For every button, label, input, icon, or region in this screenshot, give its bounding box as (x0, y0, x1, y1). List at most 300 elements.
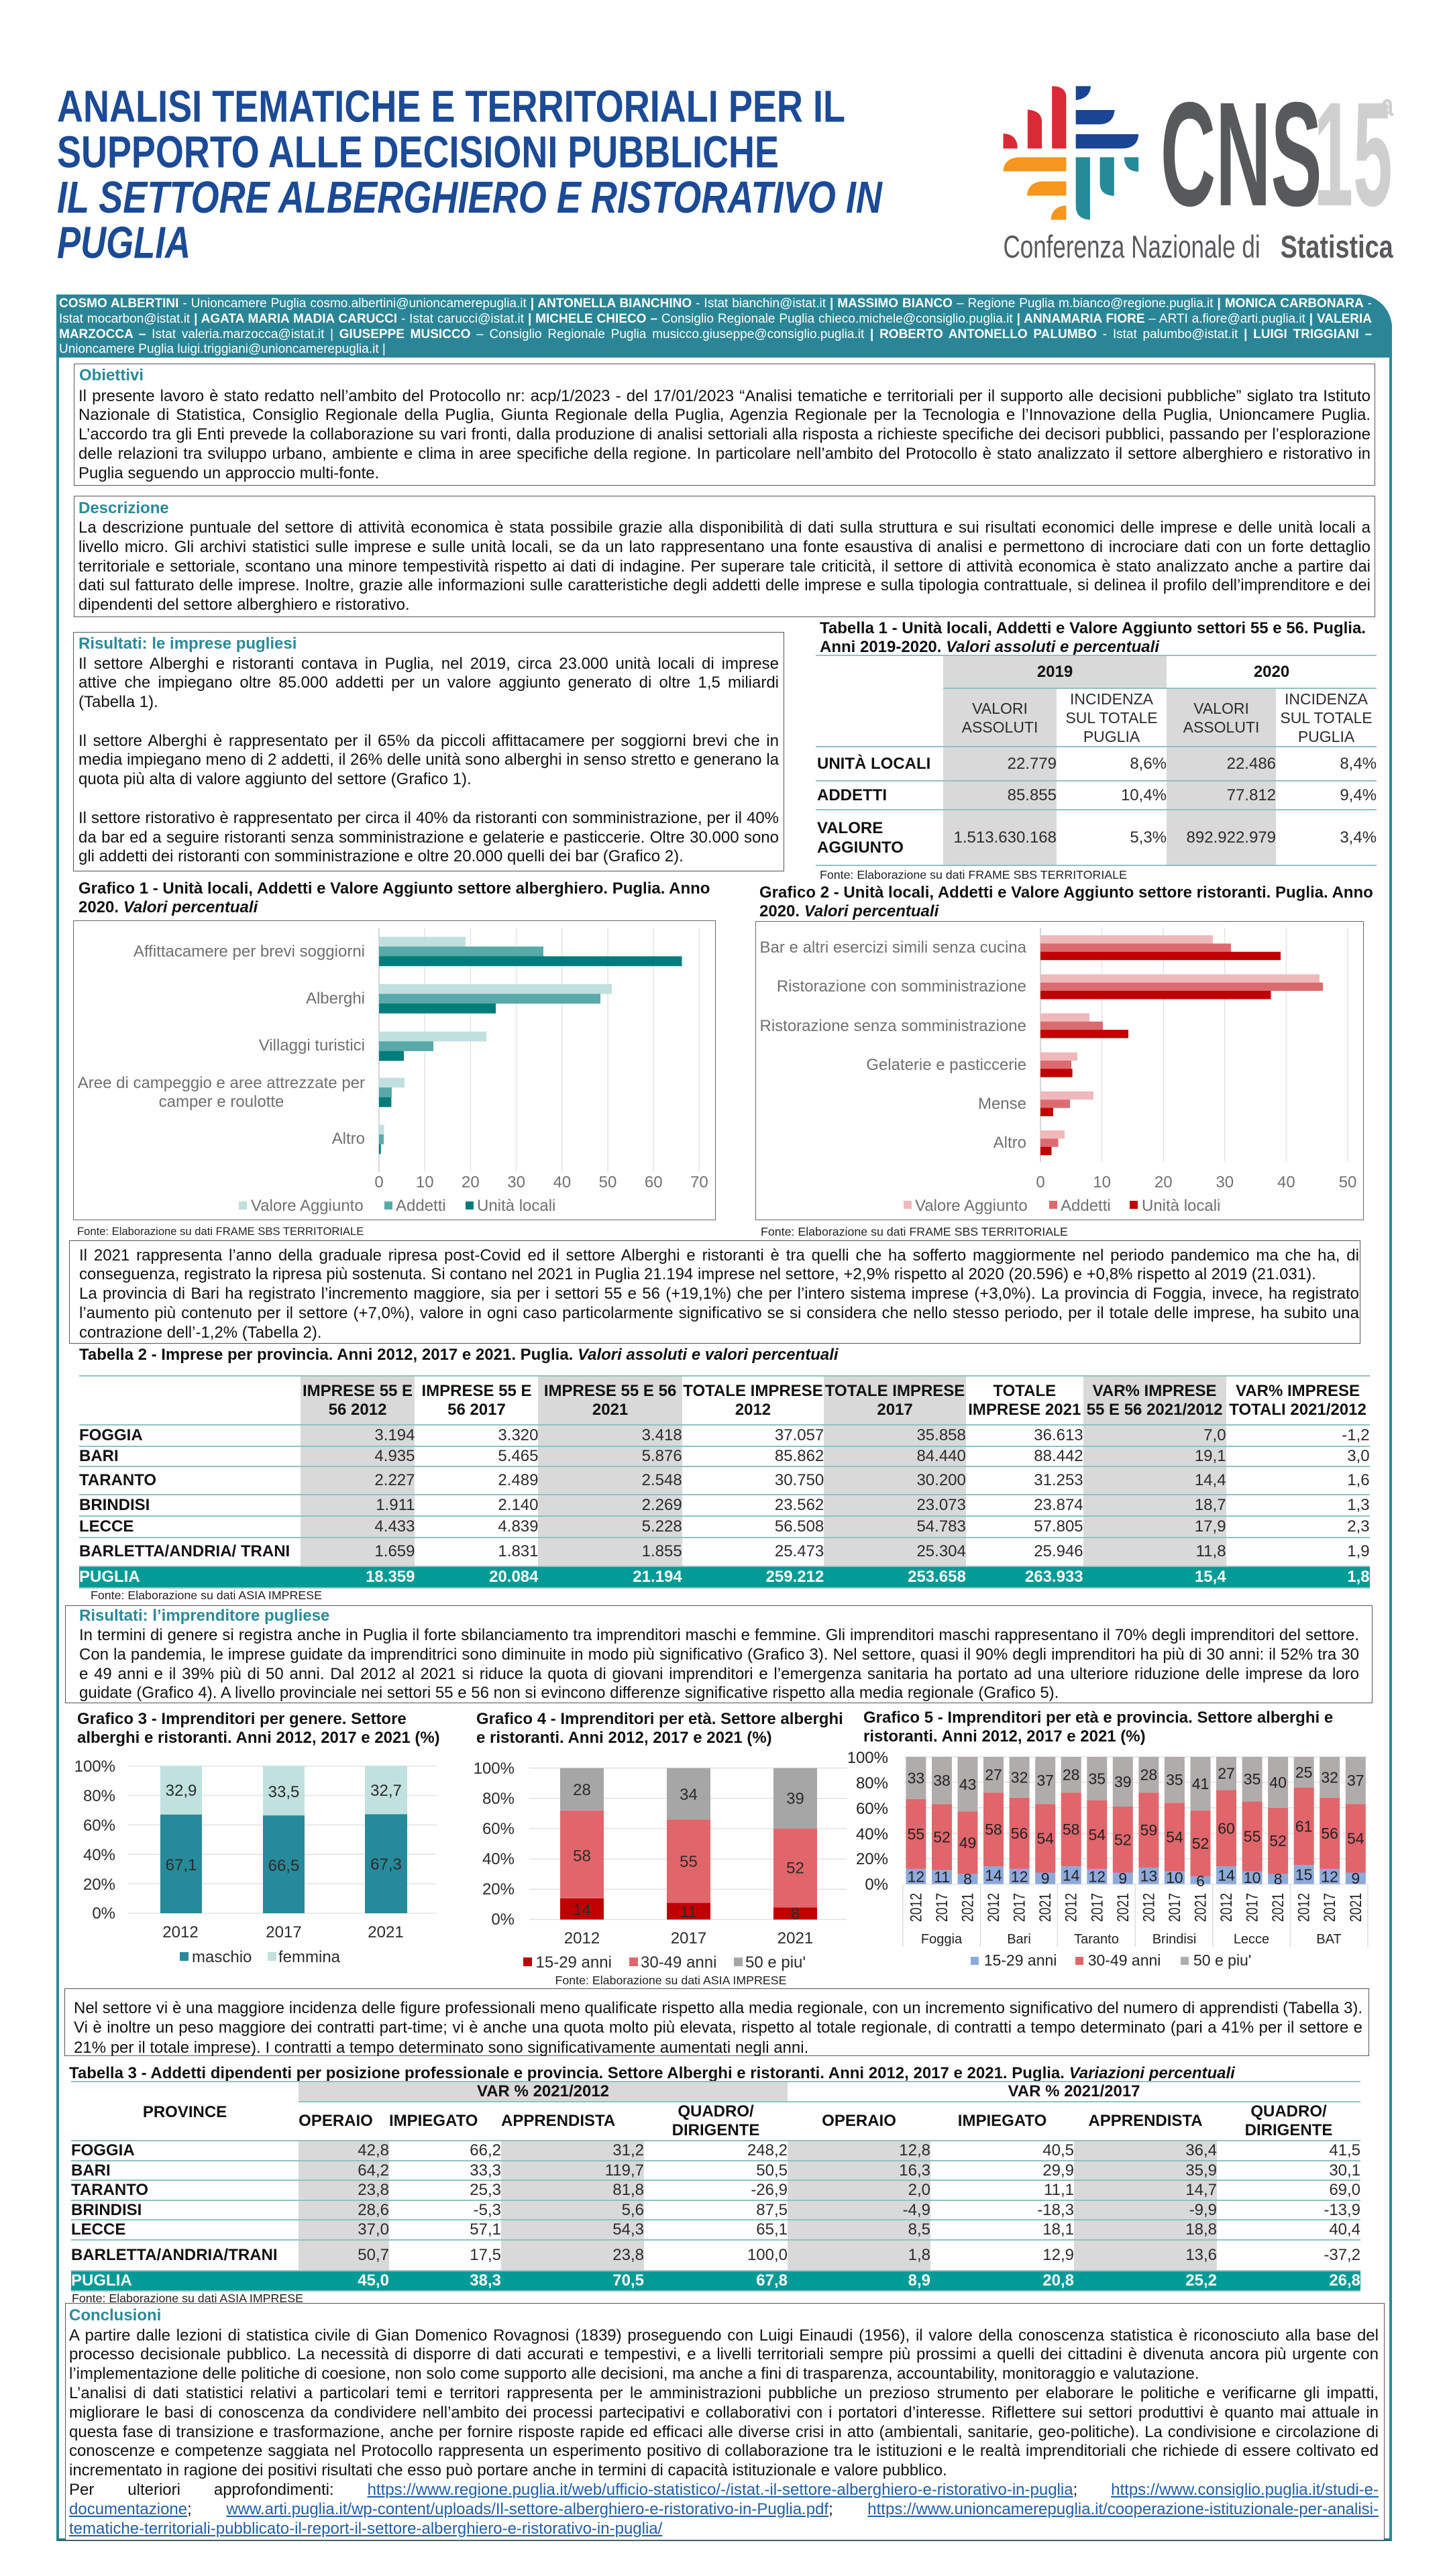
bars: Taranto: 52 (1114, 1831, 1132, 1848)
text block: Obiettivi: delle relazioni tra sviluppo urbano, ambiente e clima in aree specifiche della regione. In particolare nell’ambito del Protocollo è stato analizzato il settore alberghiero e ristorativo in (78, 445, 1371, 463)
bar: 2017 (667, 1768, 710, 1947)
table: Tabella 3: 67,8 (756, 2271, 788, 2290)
text block: figure professionali: 21% per il totale imprese). I contratti a tempo determinato sono significativamente aumentati negli anni. (74, 2038, 808, 2057)
table: Tabella 1: SUL TOTALE (1065, 708, 1158, 726)
bar: 2012: 14 (573, 1901, 591, 1919)
text block: Conclusioni: L’analisi di dati statistici relativi a particolari temi e territori rappresenta per le amministrazioni pubbliche un prezioso strumento per elaborare le politiche e verificarne gli impatti, (69, 2384, 1379, 2402)
bars: BAT: 2012 (1295, 1893, 1313, 1922)
heading: Grafico 1: Grafico 1 - Unità locali, Addetti e Valore Aggiunto settore alberghiero. Puglia. Anno (78, 879, 710, 898)
bars: BAT: 54 (1347, 1829, 1364, 1847)
text block: Conclusioni: A partire dalle lezioni di statistica civile di Gian Domenico Rovagnosi (1839) proseguendo con Luigi Einaudi (1956), il valore della conoscenza statistica è riconosciuto alla base del (69, 2326, 1379, 2345)
bars: Foggia: 12 (908, 1868, 924, 1885)
table: Tabella 1: 10,4% (1121, 786, 1167, 804)
table: Tabella 1: ASSOLUTI (962, 718, 1038, 735)
table: Tabella 3: IMPIEGATO (389, 2112, 478, 2130)
table: Tabella 2: TOTALE IMPRESE (825, 1382, 965, 1399)
stacked bar chart: Grafico 5 (849, 1749, 1368, 1969)
table: Tabella 3: APPRENDISTA (501, 2112, 615, 2130)
y axis labels: 60% (83, 1817, 115, 1835)
bar: 2021 (365, 1766, 407, 1941)
table: Tabella 2: 56 2017 (447, 1401, 506, 1418)
bar: 2012 (160, 1766, 202, 1941)
table: Tabella 2: 5.465 (498, 1447, 538, 1465)
table: Tabella 2: 57.805 (1034, 1517, 1083, 1536)
table: Tabella 2: FOGGIA (79, 1426, 143, 1444)
y axis labels: 0% (92, 1904, 115, 1923)
axis labels: 70 (690, 1173, 708, 1191)
table: Tabella 3: 100,0 (747, 2246, 788, 2264)
text block: Descrizione: livello micro. Gli archivi statistici sulle imprese e sulle unità locali, se da un lato rappresentano una fonte esaustiva di analisi e permettono di incrociare dati con un forte dettaglio (78, 538, 1371, 556)
y axis labels (474, 1760, 515, 1929)
table: Tabella 3: 69,0 (1329, 2181, 1360, 2199)
heading: Tabella 3: Tabella 3 - Addetti dipendenti per posizione professionale e provincia. Settore Alberghi e ristoranti. Anni 2012, 2017 e 2021. Puglia. Variazioni percentuali (69, 2064, 1235, 2082)
panel: authors band: COSMO ALBERTINI - Unioncamere Puglia cosmo.albertini@unioncamerepuglia.it | ANTONELLA BIANCHINO - Istat bianchin@istat.it | MASSIMO BIANCO – Regione Puglia m.bianco@regione.puglia.it | MONICA CARBONARA - (59, 297, 1372, 311)
bar: 2012: 67,1 (166, 1856, 197, 1874)
bars: Ristorazione con somministrazione: Ristorazione con somministrazione (777, 977, 1026, 996)
table: Tabella 2: 15,4 (1195, 1568, 1226, 1586)
bars: Brindisi: Brindisi (1152, 1932, 1196, 1947)
table: Tabella 2: 54.783 (916, 1517, 966, 1536)
bars: Foggia: 55 (908, 1825, 924, 1843)
table: Tabella 1: ADDETTI (817, 786, 887, 804)
bars: BAT: 32 (1321, 1768, 1338, 1786)
heading: Descrizione: Descrizione (78, 499, 169, 517)
bars: BAT: 2021 (1346, 1893, 1364, 1922)
panel: Descrizione (74, 496, 1375, 617)
text block: imprenditore (79, 1626, 1359, 1702)
bars: Brindisi: 59 (1140, 1821, 1157, 1839)
heading: Grafico 3 (77, 1710, 440, 1747)
table: Tabella 1: PUGLIA (1083, 727, 1140, 745)
bars: Bari: Bari (1007, 1932, 1031, 1947)
table: Tabella 2: 7,0 (1203, 1426, 1226, 1444)
heading: Grafico 1 (78, 879, 710, 916)
bars: BAT: 61 (1295, 1817, 1312, 1835)
title (57, 81, 883, 268)
bars: Lecce: 2012 (1217, 1893, 1235, 1922)
text block: ripresa 2021: conseguenza, registrato la ripresa più sostenuta. Si contano nel 2021 in Puglia 21.194 imprese nel settore, +2,9% rispetto al 2020 (20.596) e +0,8% rispetto al 2019 (21.031). (79, 1265, 1316, 1283)
bars: Bari: 2021 (1036, 1893, 1055, 1922)
table: Tabella 3: OPERAIO (822, 2112, 896, 2130)
axis labels: 40 (553, 1173, 571, 1191)
bars: Lecce: 27 (1218, 1765, 1235, 1782)
table: Tabella 2: 1,9 (1347, 1542, 1370, 1560)
table: Tabella 2: 2021 (592, 1401, 628, 1418)
panel: Obiettivi (74, 364, 1375, 486)
axis labels: 30 (1216, 1173, 1234, 1191)
table: Tabella 2: 1,8 (1347, 1568, 1370, 1586)
table: Tabella 3: FOGGIA (71, 2141, 135, 2159)
table: Tabella 1: 1.513.630.168 (954, 828, 1057, 847)
table: Tabella 3: -13,9 (1324, 2200, 1360, 2219)
table: Tabella 3: 25,2 (1185, 2271, 1217, 2290)
table: Tabella 2: 23.562 (775, 1496, 824, 1514)
table: Tabella 2: BARLETTA/ANDRIA/ TRANI (79, 1542, 290, 1560)
bars: Lecce: 55 (1244, 1827, 1260, 1845)
bars: Foggia (906, 1757, 978, 1947)
table: Tabella 2: TOTALE IMPRESE (683, 1382, 823, 1399)
source: Tabella 3: Fonte: Elaborazione su dati ASIA IMPRESE (72, 2292, 303, 2305)
table: Tabella 2: 1,6 (1347, 1471, 1370, 1489)
y axis labels: 80% (856, 1774, 888, 1792)
logo: CNS 15a Conferenza Nazionale di Statistica: CNS (1161, 72, 1322, 237)
table: Tabella 1: 8,4% (1340, 754, 1377, 773)
bar: 2017: 34 (680, 1786, 698, 1804)
table: Tabella 2: 1.911 (376, 1496, 415, 1514)
text block: Risultati imprese: attive che impiegano oltre 85.000 addetti per un valore aggiunto generato di oltre 1,5 miliardi (78, 674, 779, 692)
bars: BAT: 15 (1295, 1866, 1312, 1883)
text block: Obiettivi: L’accordo tra gli Enti prevede la collaborazione su vari fronti, dalla produzione di analisi settoriali alla risposta a richieste specifiche dei decisori pubblici, passando per l’esplorazione (78, 425, 1371, 443)
table: Tabella 3: 50,5 (756, 2161, 788, 2179)
axis labels: 20 (462, 1173, 480, 1191)
table: Tabella 3: 5,6 (622, 2200, 644, 2219)
table: Tabella 2: 2,3 (1347, 1517, 1370, 1536)
y axis labels: 60% (856, 1800, 888, 1818)
table: Tabella 3: PUGLIA (71, 2271, 132, 2290)
text block: Risultati imprese (78, 655, 779, 865)
table: Tabella 3: 66,2 (470, 2141, 501, 2159)
table: Tabella 2: 30.200 (916, 1471, 966, 1489)
bars: Bari: 32 (1011, 1768, 1028, 1786)
table: Tabella 2: 18.359 (366, 1568, 415, 1586)
bar: 2012: 32,9 (166, 1782, 197, 1800)
table: Tabella 3: 18,8 (1185, 2220, 1217, 2239)
table: Tabella 2: 37.057 (775, 1426, 824, 1444)
heading: Grafico 5: ristoranti. Anni 2012, 2017 e 2021 (%) (863, 1727, 1146, 1746)
table: Tabella 3: 45,0 (358, 2271, 389, 2290)
axis labels: 40 (1277, 1173, 1295, 1191)
table: Tabella 3: 16,3 (899, 2161, 930, 2179)
bars: Bari: 12 (1011, 1868, 1028, 1885)
bars: BAT: 9 (1351, 1870, 1360, 1887)
table: Tabella 2: 23.874 (1034, 1496, 1083, 1514)
table: Tabella 3: 25,3 (470, 2181, 501, 2199)
table: Tabella 3: 12,9 (1042, 2246, 1074, 2264)
table: Tabella 2: 2.140 (498, 1496, 538, 1514)
legend (180, 1948, 341, 1966)
table: Tabella 2: BARI (79, 1447, 119, 1465)
panel: Risultati imprenditore pugliese (65, 1605, 1373, 1703)
table: Tabella 1: 2020 (1254, 663, 1289, 680)
table: Tabella 2: TARANTO (79, 1471, 156, 1489)
table: Tabella 3: BARI (71, 2161, 111, 2179)
table: Tabella 2: IMPRESE 55 E (421, 1382, 532, 1399)
axis labels: 20 (1155, 1173, 1173, 1191)
bars: BAT: 25 (1295, 1764, 1312, 1781)
table: Tabella 2: 56.508 (775, 1517, 824, 1536)
bars: Ristorazione senza somministrazione (759, 1013, 1128, 1038)
table: Tabella 2: 31.253 (1034, 1471, 1083, 1489)
y axis labels: 40% (482, 1850, 515, 1868)
bar: 2017 (263, 1766, 305, 1941)
text block: imprenditore: guidate (Grafico 4). A livello provinciale nei settori 55 e 56 non si evincono differenze significative rispetto alla media regionale (Grafico 5). (79, 1684, 1059, 1702)
table: Tabella 2: 1.831 (498, 1542, 538, 1560)
legend: Unità locali (477, 1197, 555, 1215)
text block: Risultati imprese: Il settore Alberghi e ristoranti contava in Puglia, nel 2019, circa 23.000 unità locali di imprese (78, 655, 779, 672)
bars: Taranto: 2012 (1062, 1893, 1080, 1922)
table: Tabella 3 (71, 2081, 1360, 2292)
bar: 2021: 39 (786, 1790, 804, 1808)
heading: Tabella 1: Tabella 1 - Unità locali, Addetti e Valore Aggiunto settori 55 e 56. Puglia. (820, 619, 1366, 637)
bars: Villaggi turistici (259, 1032, 486, 1061)
bars: Affittacamere (133, 936, 682, 966)
table: Tabella 3: 64,2 (358, 2161, 389, 2179)
bars: Lecce: 14 (1218, 1866, 1235, 1884)
legend: 50 e piu' (745, 1953, 806, 1972)
bars: Aree di campeggio (78, 1074, 405, 1111)
bars: Foggia: 38 (933, 1772, 951, 1789)
bars: Brindisi: 54 (1166, 1829, 1183, 1846)
table: Tabella 1: 892.922.979 (1187, 828, 1276, 847)
text block: Conclusioni: questa fase di transizione e trasformazione, anche per fornire risposte rapide ed efficaci alle diverse crisi in atto (ambientali, sanitarie, geo-politiche). La condivisione e circolazione di (69, 2423, 1379, 2441)
bars: Taranto: 9 (1118, 1870, 1127, 1887)
text block: Descrizione (78, 519, 1371, 614)
bars: Foggia: 49 (959, 1834, 976, 1851)
text block: Descrizione: La descrizione puntuale del settore di attività economica è stata possibile grazie alla disponibilità di dati sulla struttura e sui risultati economici delle imprese e delle unità locali a (78, 519, 1371, 537)
bars: Lecce: 8 (1274, 1870, 1282, 1888)
source: Grafici 3-5: Fonte: Elaborazione su dati ASIA IMPRESE (555, 1974, 787, 1987)
bars: Brindisi: 10 (1166, 1869, 1183, 1886)
text block: ripresa 2021: contrazione dell’-1,2% (Tabella 2). (79, 1324, 322, 1342)
legend: Unità locali (1142, 1197, 1220, 1215)
title: PUGLIA (57, 217, 191, 268)
bar chart: Grafico 1 (73, 920, 716, 1220)
bar: 2021: 52 (786, 1860, 804, 1877)
source: Tabella 2: Fonte: Elaborazione su dati ASIA IMPRESE (91, 1589, 322, 1602)
table: Tabella 1: SUL TOTALE (1280, 708, 1373, 726)
bars: Bari: 54 (1036, 1829, 1054, 1847)
bars: Brindisi: 2021 (1191, 1893, 1210, 1922)
bars: Taranto: 54 (1089, 1826, 1106, 1843)
legend: 50 e piu' (1193, 1951, 1251, 1969)
text block: ripresa 2021: La provincia di Bari ha registrato l’incremento maggiore, sia per i settori 55 e 56 (+19,1%) che per l’intero sistema imprese (+3,0%). La provincia di Foggia, invece, ha registrato (79, 1285, 1359, 1303)
table: Tabella 2: PUGLIA (79, 1568, 140, 1586)
table: Tabella 3: 36,4 (1185, 2141, 1217, 2159)
legend (971, 1951, 1251, 1969)
bars: Foggia: 33 (908, 1769, 924, 1786)
bars: Bari: 2017 (1010, 1893, 1028, 1922)
y axis labels: 0% (491, 1911, 515, 1929)
table: Tabella 2: IMPRESE 55 E 56 (544, 1382, 676, 1399)
stacked bar chart: Grafico 3 (74, 1758, 437, 1966)
table: Tabella 3: 119,7 (605, 2161, 644, 2179)
table: Tabella 2: 19,1 (1195, 1447, 1226, 1465)
panel: Conclusioni (65, 2303, 1385, 2540)
heading: Grafico 2 (759, 883, 1373, 920)
y axis labels: 80% (83, 1787, 115, 1805)
text block: figure professionali (74, 1999, 1362, 2057)
table: Tabella 2: 263.933 (1025, 1568, 1083, 1586)
axis labels: 10 (1093, 1173, 1111, 1191)
heading: Tabella 2: Tabella 2 - Imprese per provincia. Anni 2012, 2017 e 2021. Puglia. Valori assoluti e valori percentuali (79, 1346, 839, 1364)
table: Tabella 2: 85.862 (775, 1447, 824, 1465)
table: Tabella 2: 36.613 (1034, 1426, 1083, 1444)
heading: Tabella 1: Anni 2019-2020. Valori assoluti e percentuali (820, 637, 1159, 656)
table: Tabella 2: 2012 (735, 1401, 771, 1418)
legend (523, 1953, 806, 1972)
bars: BAT: 2017 (1320, 1893, 1339, 1922)
bar: 2021 (773, 1768, 817, 1947)
text block: figure professionali: Nel settore vi è una maggiore incidenza delle figure professionali meno qualificate rispetto alla media regionale, con un incremento significativo del numero di apprendisti (Tabella 3). (74, 1999, 1362, 2017)
stacked bar chart: Grafico 4 (474, 1760, 847, 1987)
table: Tabella 3: DIRIGENTE (672, 2121, 759, 2139)
bars: Ristorazione con somministrazione (777, 974, 1323, 999)
table: Tabella 3: -9,9 (1189, 2200, 1217, 2219)
text block: Descrizione: territoriale e settoriale, scontano una minore tempestività rispetto ai dati di indagine. Per superare tale criticità, il settore di attività economica è stato analizzato anche a partire dai (78, 557, 1371, 576)
table: Tabella 2: 2.227 (374, 1471, 415, 1489)
table: Tabella 3: 30,1 (1329, 2161, 1360, 2179)
y axis labels: 40% (83, 1846, 115, 1864)
bar: 2017: 66,5 (268, 1857, 299, 1875)
table: Tabella 2: -1,2 (1342, 1426, 1370, 1444)
table: Tabella 2: 14,4 (1195, 1471, 1226, 1489)
table: Tabella 2: 35.858 (916, 1426, 966, 1444)
text block: Obiettivi: Il presente lavoro è stato redatto nell’ambito del Protocollo nr: acp/1/2023 - del 17/01/2023 “Analisi tematiche e territoriali per il supporto alle decisioni pubbliche” siglato tra Istituto (78, 386, 1371, 405)
panel: Risultati le imprese pugliesi (73, 632, 784, 871)
legend (904, 1197, 1220, 1215)
bars: BAT: 37 (1347, 1772, 1364, 1789)
table: Tabella 1: VALORI (1193, 699, 1249, 716)
table: Tabella 2: 2.489 (498, 1471, 538, 1489)
table: Tabella 3: QUADRO/ (678, 2102, 754, 2121)
table: Tabella 2: 3.194 (374, 1426, 415, 1444)
heading: Grafico 4: e ristoranti. Anni 2012, 2017 e 2021 (%) (476, 1729, 772, 1747)
table: Tabella 3: 2,0 (908, 2181, 930, 2199)
bars: Altro (332, 1125, 384, 1154)
bars: Bari: 2012 (984, 1893, 1002, 1922)
legend: 15-29 anni (984, 1951, 1057, 1969)
table: Tabella 2: 11,8 (1196, 1542, 1226, 1560)
table: Tabella 2 (79, 1375, 1370, 1589)
text block: Obiettivi: Nazionale di Statistica, Consiglio Regionale della Puglia, Giunta Regionale della Puglia, Agenzia Regionale per la Tecnologia e l’Innovazione della Puglia, Unioncamere Puglia. (78, 406, 1371, 424)
bars: Bari: 37 (1036, 1772, 1054, 1789)
bars: Mense (978, 1091, 1093, 1116)
table: Tabella 3: -26,9 (751, 2181, 788, 2199)
table: Tabella 2: 25.304 (916, 1542, 966, 1560)
heading: Grafico 1: 2020. Valori percentuali (78, 898, 258, 916)
table: Tabella 3: PROVINCE (143, 2103, 227, 2121)
bars: Taranto: 12 (1089, 1868, 1106, 1885)
bars: Foggia: 2017 (932, 1893, 951, 1922)
table: Tabella 1: 22.779 (1008, 754, 1057, 773)
source: Grafico 2: Fonte: Elaborazione su dati FRAME SBS TERRITORIALE (761, 1225, 1068, 1238)
table: Tabella 2: 25.473 (775, 1542, 824, 1560)
table: Tabella 2: 3,0 (1347, 1447, 1370, 1465)
table: Tabella 2: 2017 (877, 1401, 913, 1418)
text block: Obiettivi (78, 386, 1371, 482)
bar: 2017: 33,5 (268, 1783, 299, 1801)
text block: imprenditore: In termini di genere si registra anche in Puglia il forte sbilanciamento tra imprenditori maschi e femmine. Gli imprenditori maschi rappresentano il 70% degli imprenditori del settore. (79, 1626, 1359, 1644)
y axis labels (74, 1758, 115, 1923)
bars: Lecce: 40 (1269, 1774, 1287, 1791)
text block: Risultati imprese: da bar ed a seguire ristoranti senza somministrazione e gelaterie e pasticcerie. Oltre 30.000 sono (78, 828, 779, 847)
table: Tabella 3: OPERAIO (299, 2112, 373, 2130)
text block: ripresa 2021 (79, 1246, 1359, 1342)
text block: Risultati imprese: media impiegano meno di 2 addetti, il 26% delle unità sono alberghi in senso stretto e generano la (78, 751, 779, 769)
table: Tabella 2: 17,9 (1195, 1517, 1226, 1536)
bars: Lecce: 2021 (1269, 1893, 1287, 1922)
table: Tabella 3: 248,2 (747, 2141, 788, 2159)
bars: Gelaterie e pasticcerie: Gelaterie e pasticcerie (866, 1056, 1026, 1074)
table: Tabella 1: 9,4% (1340, 786, 1377, 804)
bars: Foggia: 52 (933, 1829, 951, 1846)
text block: Conclusioni: tematiche-territoriali-pubblicato-il-report-il-settore-alberghiero-e-ristorativo-in-puglia/ (69, 2520, 662, 2538)
bars: BAT: 56 (1321, 1825, 1338, 1842)
logo: CNS 15a Conferenza Nazionale di Statistica: a (1381, 89, 1394, 123)
table: Tabella 2: 1.659 (374, 1542, 415, 1560)
bars: Foggia: Foggia (921, 1932, 963, 1947)
text block: Conclusioni: documentazione; www.arti.puglia.it/wp-content/uploads/Il-settore-alberghiero-e-ristorativo-in-Puglia.pdf; https://www.unioncamerepuglia.it/cooperazione-istituzionale-per-analisi- (69, 2500, 1379, 2518)
logo: CNS 15a Conferenza Nazionale di Statistica: 15 (1313, 71, 1393, 237)
table: Tabella 1: 3,4% (1340, 828, 1377, 847)
bar: 2012: 2012 (162, 1923, 199, 1941)
table: Tabella 3: 35,9 (1185, 2161, 1217, 2179)
bars: Lecce: 10 (1244, 1869, 1260, 1886)
axis labels (374, 1173, 708, 1191)
bar: 2017: 11 (680, 1903, 697, 1921)
text block: Risultati imprese: Il settore Alberghi è rappresentato per il 65% da piccoli affittacamere per soggiorni brevi che in (78, 732, 779, 750)
text block: imprenditore: e 49 anni e il 39% più di 50 anni. Dal 2012 al 2021 si riduce la quota di giovani imprenditori e l’emergenza sanitaria ha portato ad una ulteriore riduzione delle imprese da loro (79, 1665, 1359, 1683)
bar: 2021: 2021 (368, 1923, 404, 1941)
table: Tabella 3: 40,5 (1042, 2141, 1074, 2159)
axis labels: 50 (1339, 1173, 1356, 1191)
bars: BAT (1294, 1757, 1366, 1947)
table: Tabella 3: 13,6 (1185, 2246, 1217, 2264)
table: Tabella 2: 30.750 (775, 1471, 824, 1489)
y axis labels: 80% (482, 1790, 515, 1808)
axis labels (1036, 1173, 1356, 1191)
table: Tabella 2: 5.876 (642, 1447, 682, 1465)
heading: Grafico 5: Grafico 5 - Imprenditori per età e provincia. Settore alberghi e (863, 1709, 1333, 1727)
table: Tabella 2: 259.212 (766, 1568, 824, 1586)
bar chart: Grafico 2 (755, 921, 1364, 1220)
table: Tabella 3: 33,3 (470, 2161, 501, 2179)
table: Tabella 3: 81,8 (612, 2181, 644, 2199)
heading: Grafico 5 (863, 1709, 1333, 1746)
bars: Foggia: 11 (934, 1868, 950, 1886)
bar: 2021: 67,3 (370, 1856, 402, 1874)
heading: Grafico 3: Grafico 3 - Imprenditori per genere. Settore (77, 1710, 407, 1728)
table: Tabella 3: 29,9 (1042, 2161, 1074, 2179)
panel: authors band (56, 294, 1392, 358)
heading: Conclusioni: Conclusioni (69, 2306, 161, 2324)
table: Tabella 3: 31,2 (612, 2141, 644, 2159)
panel: figure professionali text (64, 1988, 1368, 2056)
bars: Altro (994, 1130, 1065, 1155)
text block: Conclusioni (69, 2326, 1379, 2538)
table: Tabella 2: 20.084 (489, 1568, 538, 1586)
bar: 2017: 2017 (671, 1929, 706, 1947)
table: Tabella 1: AGGIUNTO (817, 839, 904, 856)
bars: Alberghi (306, 984, 612, 1014)
table: Tabella 3: 14,7 (1185, 2181, 1217, 2199)
bars: Lecce: 2017 (1243, 1893, 1261, 1922)
table: Tabella 2: TOTALI 2021/2012 (1229, 1401, 1366, 1418)
table: Tabella 3: 8,9 (908, 2271, 930, 2290)
table: Tabella 1: 5,3% (1130, 828, 1167, 847)
bars: Taranto: 2017 (1087, 1893, 1106, 1922)
axis labels: 0 (1036, 1173, 1045, 1191)
axis labels: 10 (416, 1173, 434, 1191)
bars: Taranto: 39 (1114, 1773, 1132, 1790)
bars: Lecce (1216, 1757, 1288, 1947)
table: Tabella 3: -37,2 (1324, 2246, 1360, 2264)
table: Tabella 3: 8,5 (908, 2220, 930, 2239)
table: Tabella 2: 4.935 (374, 1447, 415, 1465)
bars: Brindisi (1138, 1757, 1210, 1947)
table: Tabella 1: UNITÀ LOCALI (817, 754, 930, 773)
title: SUPPORTO ALLE DECISIONI PUBBLICHE (57, 127, 779, 177)
